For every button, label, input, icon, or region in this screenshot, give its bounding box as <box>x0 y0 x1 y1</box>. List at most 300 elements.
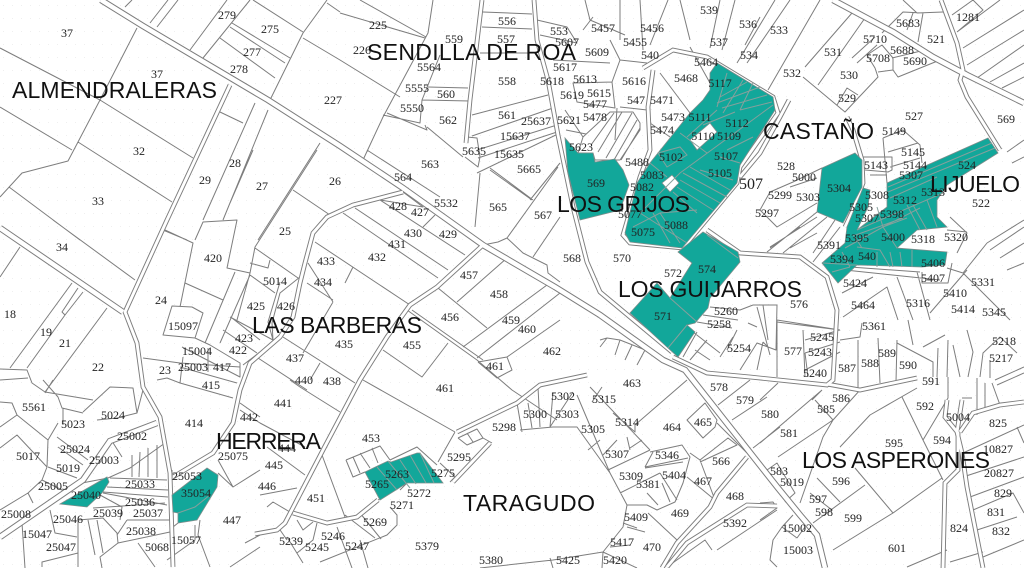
parcel numbers: 5298 <box>492 420 516 434</box>
parcel numbers: 468 <box>726 489 744 503</box>
highlighted area: Castaño <box>817 153 862 223</box>
parcel numbers: 5398 <box>880 207 904 221</box>
parcel numbers: 26 <box>329 174 341 188</box>
parcel numbers: 5308 <box>865 188 889 202</box>
parcel numbers: 32 <box>133 144 145 158</box>
parcel numbers: 831 <box>987 505 1005 519</box>
place name: Lijuelo: LIJUELO <box>930 171 1020 197</box>
parcel numbers: 25036 <box>125 495 155 509</box>
parcel numbers: 5263 <box>385 467 409 481</box>
parcel numbers: 531 <box>824 45 842 59</box>
parcel numbers: 5024 <box>101 408 125 422</box>
parcel numbers: 278 <box>230 62 248 76</box>
parcel numbers: 5245 <box>810 330 834 344</box>
parcel numbers: 507 <box>739 176 763 193</box>
parcel numbers: 25002 <box>117 429 147 443</box>
parcel numbers: 37 <box>151 67 163 81</box>
place name: Los Asperones: LOS ASPERONES <box>802 447 990 473</box>
parcel numbers: 534 <box>740 48 758 62</box>
parcel numbers: 25008 <box>1 507 31 521</box>
parcel numbers: 5400 <box>881 230 905 244</box>
parcel numbers: 598 <box>815 505 833 519</box>
parcel numbers: 559 <box>445 32 463 46</box>
parcel numbers: 431 <box>388 237 406 251</box>
parcel numbers: 5117 <box>708 76 732 90</box>
place name: Herrera: HERRERA <box>216 428 322 454</box>
parcel numbers: 576 <box>790 297 808 311</box>
parcel numbers: 25040 <box>71 488 101 502</box>
parcel numbers: 446 <box>258 479 276 493</box>
parcel numbers: 530 <box>840 68 858 82</box>
parcel numbers: 5708 <box>866 51 890 65</box>
parcel numbers: 5688 <box>890 43 914 57</box>
parcel numbers: 5082 <box>630 180 654 194</box>
parcel numbers: 22 <box>92 360 104 374</box>
parcel numbers: 420 <box>204 251 222 265</box>
parcel numbers: 277 <box>243 45 261 59</box>
parcel numbers: 5004 <box>946 410 970 424</box>
parcel numbers: 5361 <box>862 319 886 333</box>
parcel numbers: 5000 <box>792 170 816 184</box>
parcel numbers: 586 <box>832 391 850 405</box>
parcel numbers: 29 <box>199 173 211 187</box>
parcel numbers: 564 <box>394 170 412 184</box>
parcel numbers: 5272 <box>407 486 431 500</box>
parcel numbers: 458 <box>490 287 508 301</box>
parcel numbers: 5316 <box>906 296 930 310</box>
parcel numbers: 824 <box>950 521 968 535</box>
parcel numbers: 825 <box>989 416 1007 430</box>
parcel numbers: 5240 <box>803 366 827 380</box>
parcel numbers: 434 <box>314 275 332 289</box>
parcel numbers: 599 <box>844 511 862 525</box>
parcel numbers: 5609 <box>585 45 609 59</box>
parcel numbers: 5295 <box>447 450 471 464</box>
parcel numbers: 5143 <box>864 158 888 172</box>
parcel numbers: 5410 <box>943 286 967 300</box>
parcel numbers: 5077 <box>618 207 642 221</box>
parcel numbers: 20827 <box>984 466 1014 480</box>
parcel numbers: 5404 <box>662 468 686 482</box>
parcel numbers: 595 <box>885 436 903 450</box>
parcel numbers: 465 <box>694 415 712 429</box>
parcel numbers: 227 <box>324 93 342 107</box>
parcel numbers: 444 <box>278 441 296 455</box>
parcel numbers: 21 <box>59 336 71 350</box>
parcel numbers: 469 <box>671 506 689 520</box>
parcel numbers: 579 <box>736 393 754 407</box>
parcel numbers: 453 <box>362 431 380 445</box>
parcel numbers: 18 <box>4 307 16 321</box>
parcel numbers: 5532 <box>434 196 458 210</box>
parcel numbers: 521 <box>927 32 945 46</box>
parcel numbers: 5561 <box>22 400 46 414</box>
highlighted area: Taragudo parcels <box>365 453 443 500</box>
parcel numbers: 5083 <box>640 168 664 182</box>
parcel numbers: 5307 <box>855 211 879 225</box>
parcel numbers: 34 <box>56 240 68 254</box>
parcel numbers: 567 <box>534 208 552 222</box>
parcel numbers: 440 <box>295 373 313 387</box>
parcel numbers: 460 <box>518 322 536 336</box>
parcel numbers: 5088 <box>664 218 688 232</box>
parcel numbers: 577 <box>784 344 802 358</box>
parcel numbers: 5305 <box>849 200 873 214</box>
parcel numbers: 571 <box>654 309 672 323</box>
parcel numbers: 25046 <box>53 512 83 526</box>
parcel numbers: 417 <box>213 360 231 374</box>
parcel numbers: 415 <box>202 378 220 392</box>
parcel numbers: 596 <box>832 474 850 488</box>
parcel numbers: 5149 <box>882 124 906 138</box>
highlighted area: Herrera parcel 25040 <box>60 477 109 507</box>
parcel numbers: 5623 <box>569 140 593 154</box>
parcel numbers: 5478 <box>583 110 607 124</box>
parcel numbers: 5474 <box>650 123 674 137</box>
parcel numbers: 15097 <box>168 319 198 333</box>
parcel numbers: 25053 <box>172 469 202 483</box>
parcel numbers: 5414 <box>951 302 975 316</box>
parcel numbers: 558 <box>498 74 516 88</box>
parcel numbers: 461 <box>486 359 504 373</box>
parcel numbers: 562 <box>439 113 457 127</box>
parcel numbers: 5392 <box>723 516 747 530</box>
place name: Sendilla de Roa: SENDILLA DE ROA <box>367 39 577 65</box>
place name: Taragudo: TARAGUDO <box>463 490 595 516</box>
parcel numbers: 25 <box>279 224 291 238</box>
place name: Almendraleras: ALMENDRALERAS <box>12 77 217 103</box>
parcel numbers: 5379 <box>415 539 439 553</box>
parcel numbers: 533 <box>770 23 788 37</box>
parcel numbers: 5105 <box>708 166 732 180</box>
parcel numbers: 601 <box>888 541 906 555</box>
parcel numbers: 5456 <box>640 21 664 35</box>
parcel numbers: 15002 <box>782 521 812 535</box>
parcel numbers: 574 <box>698 262 716 276</box>
parcel numbers: 5619 <box>560 88 584 102</box>
parcel numbers: 5665 <box>517 162 541 176</box>
parcel numbers: 25037 <box>133 506 163 520</box>
parcel numbers: 5617 <box>553 60 577 74</box>
parcel numbers: 5019 <box>780 475 804 489</box>
parcel numbers: 5110 <box>691 129 715 143</box>
parcel numbers: 589 <box>878 346 896 360</box>
parcel numbers: 5464 <box>851 298 875 312</box>
parcel numbers: 547 <box>627 93 645 107</box>
parcel numbers: 5313 <box>921 185 945 199</box>
parcel numbers: 580 <box>761 407 779 421</box>
parcel numbers: 437 <box>286 351 304 365</box>
parcel numbers: 438 <box>323 374 341 388</box>
parcel numbers: 5014 <box>263 274 287 288</box>
parcel numbers: 5107 <box>714 149 738 163</box>
parcel numbers: 5477 <box>583 97 607 111</box>
parcel numbers: 427 <box>411 205 429 219</box>
parcel numbers: 5615 <box>587 86 611 100</box>
place name: Castaño: CASTAÑO <box>763 118 874 144</box>
parcel numbers: 529 <box>838 91 856 105</box>
parcel numbers: 470 <box>643 540 661 554</box>
parcel numbers: 5068 <box>145 540 169 554</box>
parcel numbers: 25005 <box>38 479 68 493</box>
parcel numbers: 5395 <box>845 231 869 245</box>
parcel numbers: 5217 <box>989 351 1013 365</box>
parcel numbers: 5420 <box>603 553 627 567</box>
parcel numbers: 561 <box>498 108 516 122</box>
parcel numbers: 25038 <box>126 524 156 538</box>
parcel numbers: 569 <box>587 176 605 190</box>
parcel numbers: 5407 <box>921 271 945 285</box>
parcel numbers: 5260 <box>714 304 738 318</box>
parcel numbers: 15057 <box>171 533 201 547</box>
parcel numbers: 441 <box>274 396 292 410</box>
parcel numbers: 537 <box>710 35 728 49</box>
parcel numbers: 15047 <box>22 527 52 541</box>
parcel numbers: 5425 <box>556 553 580 567</box>
parcel numbers: 5471 <box>650 93 674 107</box>
parcel numbers: 5275 <box>431 466 455 480</box>
parcel numbers: 592 <box>916 399 934 413</box>
parcel numbers: 459 <box>502 313 520 327</box>
parcel numbers: 25003 <box>89 453 119 467</box>
parcel numbers: 442 <box>240 410 258 424</box>
parcel numbers: 445 <box>265 458 283 472</box>
parcel numbers: 423 <box>235 331 253 345</box>
parcel numbers: 27 <box>256 179 268 193</box>
parcel numbers: 5271 <box>390 498 414 512</box>
parcel numbers: 462 <box>543 344 561 358</box>
parcel numbers: 5550 <box>400 101 424 115</box>
parcel numbers: 1281 <box>956 10 980 24</box>
highlighted area: Los Grijos <box>565 63 775 248</box>
parcel numbers: 5417 <box>610 535 634 549</box>
parcel numbers: 426 <box>277 299 295 313</box>
parcel numbers: 5303 <box>555 407 579 421</box>
parcel numbers: 457 <box>460 268 478 282</box>
parcel numbers: 25075 <box>218 449 248 463</box>
parcel numbers: 5269 <box>363 515 387 529</box>
parcel numbers: 5315 <box>592 392 616 406</box>
parcel numbers: 5710 <box>863 32 887 46</box>
parcel numbers: 5254 <box>727 341 751 355</box>
parcel numbers: 25047 <box>46 540 76 554</box>
highlighted area: Herrera parcel 35054 <box>172 468 218 523</box>
parcel numbers: 429 <box>439 227 457 241</box>
parcel numbers: 5297 <box>755 206 779 220</box>
parcel numbers: 15004 <box>182 344 212 358</box>
parcel numbers: 5683 <box>896 16 920 30</box>
parcel numbers: 5239 <box>279 534 303 548</box>
highlighted area: Los Guijarros <box>630 232 740 357</box>
parcel numbers: 566 <box>712 454 730 468</box>
parcel numbers: 5305 <box>581 422 605 436</box>
parcel numbers: 226 <box>353 43 371 57</box>
parcel numbers: 464 <box>663 420 681 434</box>
parcel numbers: 5246 <box>321 529 345 543</box>
parcel numbers: 5616 <box>622 74 646 88</box>
parcel numbers: 451 <box>307 491 325 505</box>
parcel numbers: 5247 <box>345 539 369 553</box>
parcel numbers: 5464 <box>694 55 718 69</box>
parcel numbers: 553 <box>550 24 568 38</box>
parcel numbers: 587 <box>838 361 856 375</box>
parcel numbers: 565 <box>489 200 507 214</box>
parcel numbers: 5307 <box>899 168 923 182</box>
parcel numbers: 430 <box>404 226 422 240</box>
parcel numbers: 279 <box>218 8 236 22</box>
parcel numbers: 24 <box>155 293 167 307</box>
parcel numbers: 5304 <box>827 181 851 195</box>
parcel numbers: 5391 <box>817 238 841 252</box>
parcel numbers: 435 <box>335 337 353 351</box>
parcel numbers: 25033 <box>125 477 155 491</box>
parcel numbers: 5312 <box>893 193 917 207</box>
parcel numbers: 5607 <box>555 35 579 49</box>
parcel numbers: 275 <box>261 22 279 36</box>
parcel numbers: 5102 <box>659 150 683 164</box>
place name: Las Barberas: LAS BARBERAS <box>252 312 422 338</box>
highlighted area: Lijuelo <box>822 138 998 283</box>
parcel numbers: 5468 <box>674 71 698 85</box>
parcel numbers: 5112 <box>725 116 749 130</box>
parcel numbers: 5019 <box>56 461 80 475</box>
parcel numbers: 5555 <box>405 81 429 95</box>
parcel numbers: 5457 <box>591 21 615 35</box>
parcel numbers: 578 <box>710 380 728 394</box>
parcel numbers: 5424 <box>843 276 867 290</box>
parcel numbers: 37 <box>61 26 73 40</box>
parcel numbers: 560 <box>437 87 455 101</box>
parcel numbers: 5406 <box>921 256 945 270</box>
parcel numbers: 5621 <box>557 113 581 127</box>
parcel numbers: 569 <box>997 112 1015 126</box>
parcel numbers: 5017 <box>16 449 40 463</box>
parcel numbers: 532 <box>783 66 801 80</box>
parcel numbers: 432 <box>368 250 386 264</box>
parcel numbers: 5145 <box>901 145 925 159</box>
parcel numbers: 5075 <box>631 225 655 239</box>
parcel numbers: 528 <box>777 159 795 173</box>
parcel numbers: 5299 <box>768 188 792 202</box>
parcel numbers: 522 <box>972 196 990 210</box>
parcel numbers: 5302 <box>551 389 575 403</box>
parcel numbers: 5473 <box>661 110 685 124</box>
parcel numbers: 5265 <box>365 477 389 491</box>
parcel numbers: 570 <box>613 251 631 265</box>
parcel numbers: 5111 <box>688 110 712 124</box>
parcel numbers: 15003 <box>783 543 813 557</box>
parcel numbers: 527 <box>905 109 923 123</box>
parcel numbers: 461 <box>436 381 454 395</box>
place name: Los Guijarros: LOS GUIJARROS <box>618 276 802 302</box>
place name: Los Grijos: LOS GRIJOS <box>557 191 690 217</box>
parcel numbers: 5564 <box>417 60 441 74</box>
parcel numbers: 10827 <box>983 442 1013 456</box>
parcel numbers: 5303 <box>796 190 820 204</box>
parcel numbers: 5300 <box>523 407 547 421</box>
parcel numbers: 581 <box>780 426 798 440</box>
parcel numbers: 5409 <box>624 510 648 524</box>
parcel numbers: 563 <box>421 157 439 171</box>
parcel numbers: 5635 <box>462 144 486 158</box>
parcel numbers: 33 <box>92 194 104 208</box>
parcel numbers: 5394 <box>830 252 854 266</box>
parcel numbers: 597 <box>809 492 827 506</box>
parcel numbers: 15637 <box>500 129 530 143</box>
parcel numbers: 5218 <box>992 334 1016 348</box>
parcel numbers: 829 <box>994 486 1012 500</box>
parcel numbers: 540 <box>858 249 876 263</box>
parcel numbers: 591 <box>922 374 940 388</box>
parcel numbers: 585 <box>817 402 835 416</box>
parcel numbers: 5243 <box>808 345 832 359</box>
parcel numbers: 556 <box>498 14 516 28</box>
parcel numbers: 25637 <box>521 114 551 128</box>
parcel numbers: 536 <box>739 17 757 31</box>
parcel numbers: 5488 <box>625 155 649 169</box>
parcel numbers: 456 <box>441 310 459 324</box>
parcel numbers: 5320 <box>944 230 968 244</box>
parcel numbers: 540 <box>641 48 659 62</box>
parcel numbers: 15635 <box>494 147 524 161</box>
parcel numbers: 5346 <box>655 448 679 462</box>
parcel numbers: 23 <box>159 363 171 377</box>
parcel numbers: 594 <box>933 433 951 447</box>
parcel numbers: 524 <box>958 158 976 172</box>
parcel numbers: 5381 <box>636 477 660 491</box>
parcel numbers: 428 <box>389 199 407 213</box>
parcel numbers: 5318 <box>911 232 935 246</box>
parcel numbers: 583 <box>770 464 788 478</box>
parcel numbers: 572 <box>664 266 682 280</box>
parcel numbers: 539 <box>700 3 718 17</box>
parcel numbers: 5245 <box>305 540 329 554</box>
parcel numbers: 5023 <box>61 417 85 431</box>
parcel numbers: 425 <box>247 299 265 313</box>
parcel numbers: 5455 <box>623 35 647 49</box>
parcel numbers: 25003 <box>178 360 208 374</box>
parcel numbers: 414 <box>185 416 203 430</box>
parcel numbers: 467 <box>694 474 712 488</box>
parcel numbers: 455 <box>403 338 421 352</box>
parcel numbers: 28 <box>229 156 241 170</box>
parcel numbers: 25039 <box>93 506 123 520</box>
parcel numbers: 5345 <box>982 305 1006 319</box>
parcel numbers: 5109 <box>717 129 741 143</box>
parcel numbers: 5618 <box>540 74 564 88</box>
parcel numbers: 557 <box>497 32 515 46</box>
parcel numbers: 5309 <box>619 469 643 483</box>
parcel numbers: 5690 <box>903 54 927 68</box>
parcel numbers: 433 <box>317 254 335 268</box>
parcel numbers: 5144 <box>903 158 927 172</box>
parcel numbers: 5258 <box>707 317 731 331</box>
parcel numbers: 225 <box>369 18 387 32</box>
parcel numbers: 19 <box>40 325 52 339</box>
parcel numbers: 568 <box>563 251 581 265</box>
parcel numbers: 25024 <box>60 442 90 456</box>
parcel numbers: 5331 <box>971 275 995 289</box>
parcel numbers: 35054 <box>181 486 211 500</box>
parcel numbers: 5314 <box>615 415 639 429</box>
parcel numbers: 5307 <box>605 447 629 461</box>
parcel numbers: 832 <box>992 524 1010 538</box>
parcel numbers: 5380 <box>479 553 503 567</box>
parcel numbers: 463 <box>623 376 641 390</box>
parcel numbers: 590 <box>899 358 917 372</box>
parcel numbers: 588 <box>861 356 879 370</box>
parcel numbers: 447 <box>223 513 241 527</box>
